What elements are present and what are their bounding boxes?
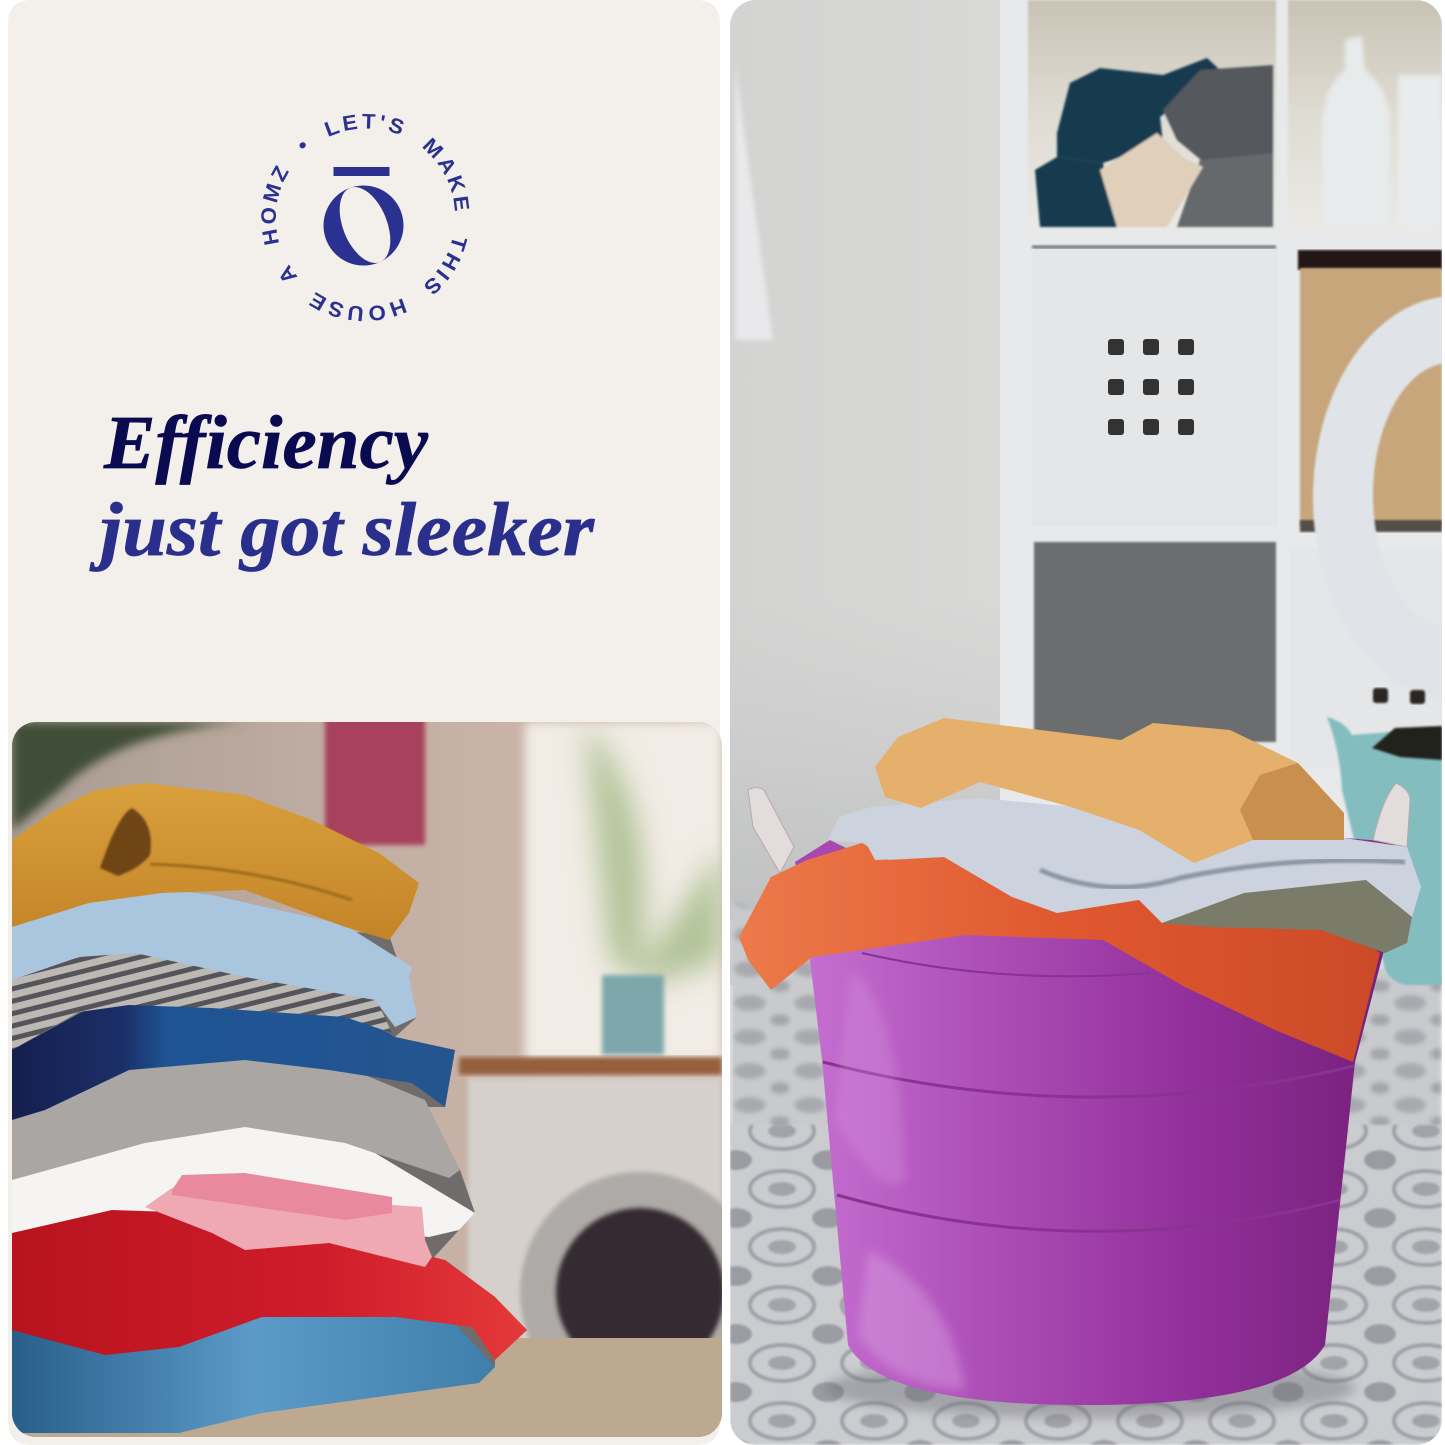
mustard crease — [150, 864, 352, 900]
mustard layer — [12, 783, 419, 940]
washing machine door — [1312, 296, 1442, 533]
gray-blue towel — [828, 798, 1421, 923]
denim layer — [12, 998, 455, 1120]
mustard fold shadow — [100, 808, 151, 876]
rolled towels on shelf — [1035, 58, 1273, 227]
logo: circular badge — [261, 114, 470, 322]
dark pink roll — [172, 1173, 392, 1220]
logo ring opening — [330, 180, 400, 270]
teal basket — [1327, 717, 1442, 985]
wooden table — [12, 1338, 722, 1438]
gray layer — [12, 1050, 460, 1180]
icon: cabinet holes — [1108, 339, 1194, 435]
purple bucket — [810, 935, 1388, 1405]
logo bar — [334, 167, 390, 176]
blurred room background — [12, 715, 760, 1437]
white layer — [12, 1115, 475, 1237]
light pink layer — [145, 1188, 432, 1267]
heading line 2: just got sleeker — [89, 488, 595, 572]
yellow knit blanket — [875, 718, 1344, 863]
right rope handle — [1373, 783, 1410, 847]
blurred room background — [730, 0, 1442, 985]
panel background — [8, 0, 720, 1445]
red layer — [12, 1200, 527, 1360]
heading — [89, 401, 595, 572]
light blue layer — [12, 885, 417, 1027]
panel: logo and headline — [8, 0, 720, 1445]
circular slogan: LET'S MAKE THIS HOUSE A HOMZ • — [261, 114, 470, 322]
white bottles — [1322, 36, 1442, 228]
bucket rim right — [1345, 838, 1395, 846]
heading line 1: Efficiency — [103, 401, 428, 485]
logo ring — [324, 186, 404, 266]
olive cloth — [1162, 875, 1412, 953]
wicker basket — [1298, 250, 1442, 532]
stack silhouette — [12, 900, 495, 1367]
photo: laundry bucket in room — [730, 0, 1445, 1445]
patterned floor near — [730, 1125, 1442, 1445]
blue jeans layer — [12, 1305, 495, 1433]
dark knobs — [1373, 688, 1425, 704]
bucket rim left — [795, 840, 846, 866]
left rope handle — [748, 788, 794, 873]
patterned floor far — [730, 900, 1442, 1140]
orange towel — [739, 843, 1380, 1062]
photo: folded clothes stack — [12, 715, 760, 1438]
striped layer — [12, 953, 392, 1050]
bucket shadow — [825, 1358, 1355, 1418]
